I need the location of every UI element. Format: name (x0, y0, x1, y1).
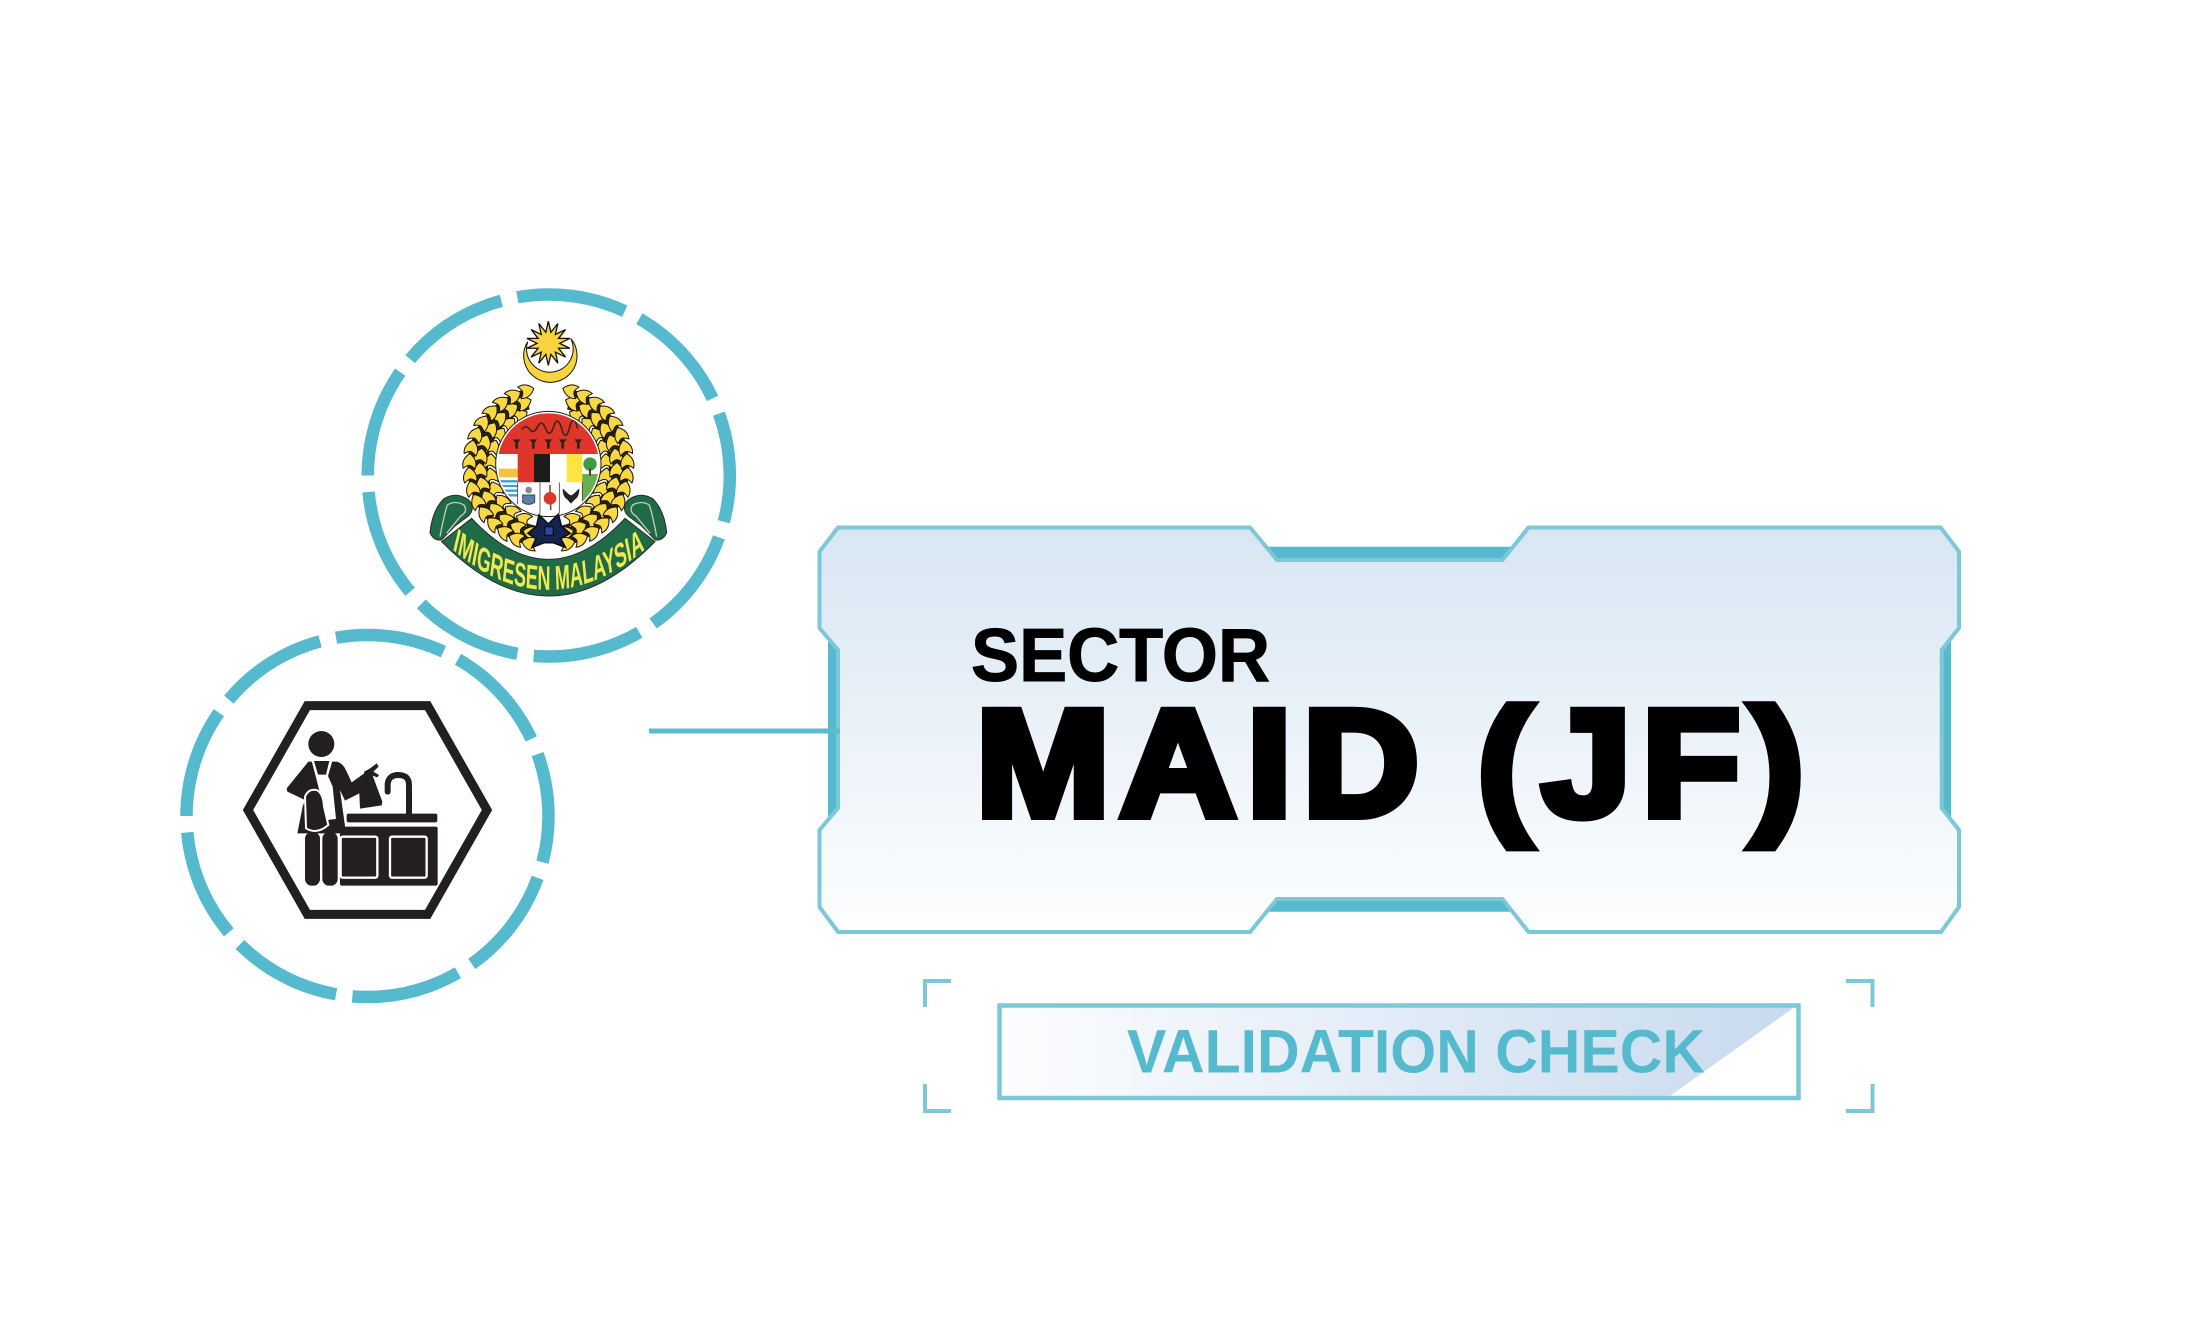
ribbon text: IMIGRESEN MALAYSIA (454, 528, 644, 590)
faucet (388, 775, 409, 815)
crescent (524, 338, 577, 382)
icon: maid at kitchen sink in hexagon (248, 706, 487, 914)
body (287, 762, 368, 833)
heading: maid: MAID (JF) (976, 680, 1804, 848)
hexagon frame (248, 706, 487, 914)
counter top (347, 814, 437, 822)
head (308, 731, 334, 757)
cabinet doors (341, 837, 377, 878)
corner brackets (925, 981, 1872, 1111)
ribbon ends (430, 495, 667, 540)
panel: sector title (820, 528, 1959, 932)
cloth (305, 790, 328, 831)
icon: Imigresen Malaysia emblem (430, 321, 668, 596)
bow (528, 514, 570, 547)
connector line (649, 728, 840, 734)
legs (305, 832, 320, 886)
dashed circle: immigration emblem (317, 244, 781, 707)
validation check label (1000, 1006, 1798, 1098)
apron (312, 761, 336, 820)
shield (496, 411, 601, 519)
label text: VALIDATION CHECK (1127, 1018, 1705, 1086)
panel accent bands (828, 547, 1951, 912)
dashed circle: maid sector (136, 584, 599, 1048)
green ribbon (442, 518, 655, 596)
wheat wreath (462, 382, 634, 551)
spray bottle (359, 763, 382, 809)
heading: sector: SECTOR (971, 613, 1270, 697)
fourteen-point star (527, 321, 570, 365)
cabinet (340, 827, 438, 886)
